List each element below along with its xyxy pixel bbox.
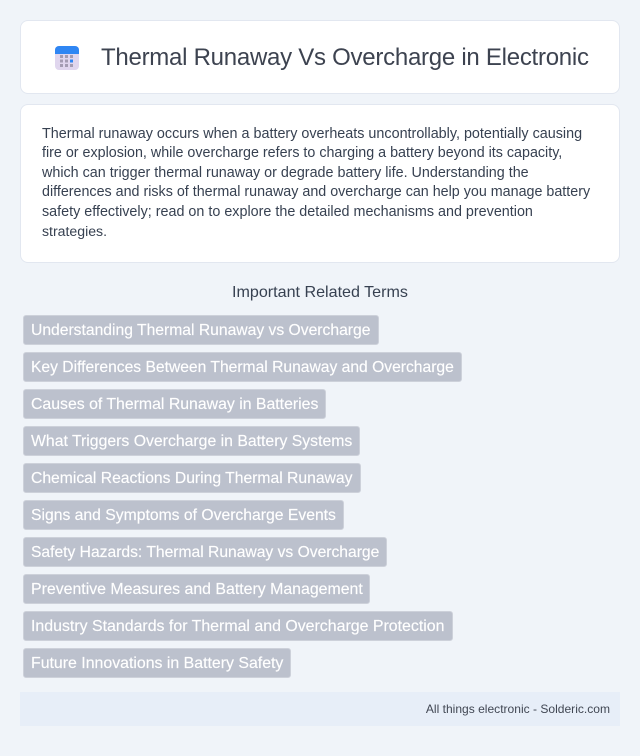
term 10: Future Innovations in Battery Safety [31, 655, 283, 672]
section heading: Important Related Terms [232, 283, 408, 301]
term 1: Understanding Thermal Runaway vs Overcharge [31, 322, 370, 339]
term 8: Preventive Measures and Battery Management [31, 581, 363, 598]
intro card [20, 104, 620, 263]
term 5 [23, 463, 361, 493]
icon: calendar [55, 46, 79, 70]
footer: All things electronic - Solderic.com [426, 702, 610, 716]
term 5: Chemical Reactions During Thermal Runaway [31, 470, 352, 487]
intro text: fire or explosion, while overcharge refers to charging a battery beyond its capacity, [42, 145, 562, 161]
footer [20, 692, 620, 726]
term 4: What Triggers Overcharge in Battery Systems [31, 433, 352, 450]
term 7 [23, 537, 387, 567]
intro text: strategies. [42, 223, 107, 239]
term 3: Causes of Thermal Runaway in Batteries [31, 396, 318, 413]
term 1 [23, 315, 379, 345]
term 4 [23, 426, 360, 456]
term 7: Safety Hazards: Thermal Runaway vs Overcharge [31, 544, 379, 561]
term 6: Signs and Symptoms of Overcharge Events [31, 507, 336, 524]
term 8 [23, 574, 370, 604]
header card [20, 20, 620, 94]
intro text: which can trigger thermal runaway or degrade battery life. Understanding the [42, 165, 529, 181]
term 2 [23, 352, 462, 382]
term 3 [23, 389, 326, 419]
term 2: Key Differences Between Thermal Runaway and Overcharge [31, 359, 454, 376]
term 9 [23, 611, 453, 641]
intro text [42, 126, 590, 239]
intro text: differences and risks of thermal runaway and overcharge can help you manage battery [42, 184, 590, 200]
term 10 [23, 648, 291, 678]
intro text: Thermal runaway occurs when a battery overheats uncontrollably, potentially causing [42, 126, 582, 142]
term 6 [23, 500, 344, 530]
title: Thermal Runaway Vs Overcharge in Electronic [101, 44, 589, 71]
term 9: Industry Standards for Thermal and Overcharge Protection [31, 618, 444, 635]
intro text: safety effectively; read on to explore the detailed mechanisms and prevention [42, 204, 533, 220]
